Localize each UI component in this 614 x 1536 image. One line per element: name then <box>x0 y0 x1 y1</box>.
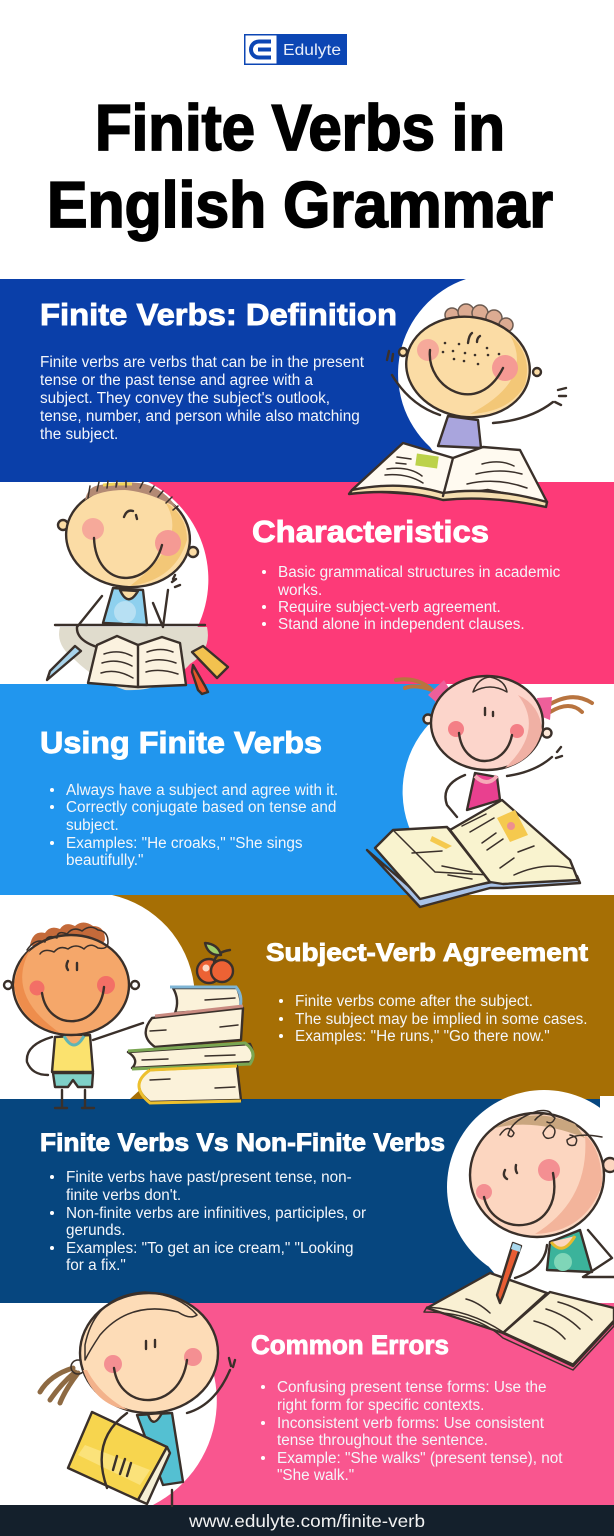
characteristics bullet list: works. <box>277 582 322 599</box>
definition paragraph: tense, number, and person while also matching <box>40 408 360 425</box>
definition paragraph <box>40 354 365 443</box>
comparison bullet list: gerunds. <box>66 1222 126 1239</box>
characteristics bullet list: Stand alone in independent clauses. <box>278 616 525 633</box>
comparison bullet list: Non-finite verbs are infinitives, participles, or <box>66 1205 366 1222</box>
title <box>47 91 553 241</box>
illustration: child writing in a book <box>424 1110 614 1370</box>
errors bullet list: tense throughout the sentence. <box>277 1432 488 1449</box>
title: Finite Verbs in <box>95 91 505 164</box>
panel: common errors <box>0 1303 614 1505</box>
heading: characteristics: Characteristics <box>252 514 489 549</box>
using bullet list: subject. <box>66 817 119 834</box>
agreement bullet list: Examples: "He runs," "Go there now." <box>295 1028 550 1045</box>
errors bullet list: right form for specific contexts. <box>277 1397 484 1414</box>
panel: finite vs non-finite <box>0 1090 614 1303</box>
definition paragraph: the subject. <box>40 426 118 443</box>
errors bullet list: Inconsistent verb forms: Use consistent <box>277 1415 545 1432</box>
illustration: boy at desk <box>47 481 228 694</box>
errors bullet list: Confusing present tense forms: Use the <box>277 1379 547 1396</box>
characteristics bullet list: Require subject-verb agreement. <box>278 599 501 616</box>
illustration: girl with pigtails and book <box>367 676 592 907</box>
characteristics bullet list: Basic grammatical structures in academic <box>278 564 561 581</box>
illustration: boy with freckles reading <box>349 304 566 507</box>
footer: www.edulyte.com/finite-verb <box>188 1511 425 1531</box>
logo: Edulyte <box>244 34 347 65</box>
comparison bullet list: Finite verbs have past/present tense, non- <box>66 1169 352 1186</box>
definition paragraph: tense or the past tense and agree with a <box>40 372 313 389</box>
footer <box>0 1505 614 1536</box>
using bullet list: Correctly conjugate based on tense and <box>66 799 336 816</box>
illustration: boy pointing at book stack <box>4 922 253 1108</box>
panel: using finite verbs <box>0 684 614 895</box>
heading: finite vs non-finite: Finite Verbs Vs Non-Finite Verbs <box>40 1129 445 1157</box>
agreement bullet list: Finite verbs come after the subject. <box>295 993 533 1010</box>
errors bullet list: "She walk." <box>277 1467 354 1484</box>
heading: definition: Finite Verbs: Definition <box>40 297 397 332</box>
comparison bullet list: finite verbs don't. <box>66 1187 181 1204</box>
comparison bullet list: Examples: "To get an ice cream," "Looking <box>66 1240 354 1257</box>
heading: using finite verbs: Using Finite Verbs <box>40 725 322 760</box>
errors bullet list <box>261 1379 563 1484</box>
using bullet list: beautifully." <box>66 852 143 869</box>
heading: subject-verb agreement: Subject-Verb Agreement <box>266 939 589 967</box>
definition paragraph: Finite verbs are verbs that can be in the present <box>40 354 365 371</box>
logo: Edulyte: Edulyte <box>283 42 341 59</box>
panel: subject-verb agreement <box>0 895 614 1099</box>
agreement bullet list: The subject may be implied in some cases. <box>295 1011 587 1028</box>
using bullet list <box>50 782 338 869</box>
definition paragraph: subject. They convey the subject's outlook, <box>40 390 330 407</box>
comparison bullet list: for a fix." <box>66 1257 126 1274</box>
title: English Grammar <box>47 168 553 241</box>
characteristics bullet list <box>262 564 561 633</box>
comparison bullet list <box>50 1169 366 1274</box>
panel: characteristics <box>0 482 614 684</box>
using bullet list: Examples: "He croaks," "She sings <box>66 835 303 852</box>
illustration: girl holding yellow book <box>40 1292 235 1506</box>
using bullet list: Always have a subject and agree with it. <box>66 782 338 799</box>
errors bullet list: Example: "She walks" (present tense), not <box>277 1450 563 1467</box>
agreement bullet list <box>279 993 587 1045</box>
panel: definition <box>0 279 614 482</box>
heading: common errors: Common Errors <box>251 1330 449 1360</box>
